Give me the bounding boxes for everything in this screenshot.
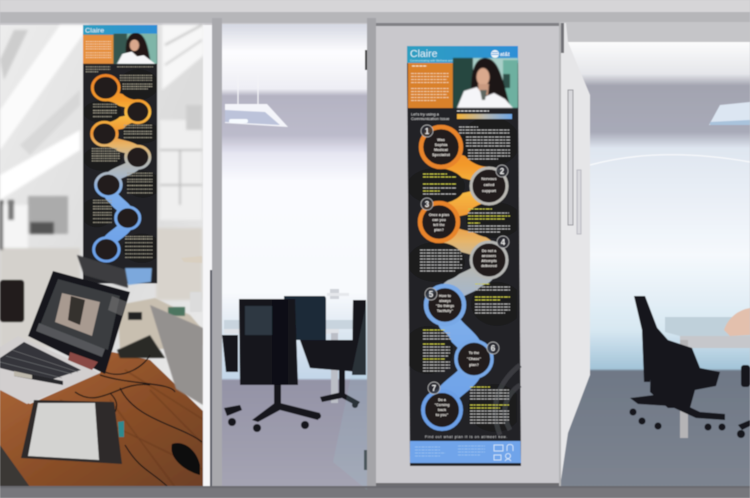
ceiling beams: [0, 25, 204, 348]
body copy yellow blocks: [423, 174, 510, 408]
question node 1: Was: [437, 138, 445, 142]
question node 4: Do not a: [482, 249, 497, 253]
question node 5: "Do things: [436, 304, 454, 308]
badge numerals: 7: [432, 384, 437, 393]
frame bottom edge: [0, 486, 750, 488]
graphics tablet: [21, 400, 124, 464]
back laptop lid: [77, 255, 128, 288]
question node 4: Attempts: [481, 259, 497, 263]
wall art frames: [568, 90, 581, 234]
door glass room: [222, 18, 376, 490]
ceiling lamp: [225, 75, 288, 127]
dark text lobes: [408, 120, 516, 432]
white strip and left divider: [203, 18, 222, 487]
question node 3: plan?: [434, 228, 444, 232]
keyboard: [0, 342, 81, 380]
hand: [724, 308, 750, 336]
question node 2: [471, 168, 507, 204]
desk scene: [0, 255, 204, 487]
stylus pen: [14, 371, 63, 385]
dark camera: [0, 280, 24, 322]
question node 6: [456, 341, 492, 377]
badge numerals: 4: [501, 238, 506, 247]
flowing ribbon: [439, 147, 489, 410]
left poster orange intro: [83, 35, 114, 64]
question node 4: answers: [482, 254, 496, 258]
section heading: Let's try using a: [411, 112, 440, 116]
silver laptop at right: [150, 305, 203, 405]
question node 5: [426, 286, 464, 324]
poster body: [407, 59, 521, 466]
question node 5: Tactfully": [437, 309, 453, 313]
laptop screen: [28, 271, 130, 374]
poster wall: [376, 23, 560, 487]
header band: [407, 46, 518, 63]
question node 1: Sophia: [435, 143, 448, 147]
question node 3: can you: [432, 218, 446, 222]
poster foot blue: [125, 268, 152, 285]
left poster ribbon: [104, 88, 138, 249]
portrait: [453, 58, 518, 108]
light curved reflection: [590, 155, 750, 165]
section heading second line: Communication Issue: [411, 116, 450, 121]
background swoosh: [495, 365, 520, 435]
question node 2: support: [482, 189, 497, 193]
question node 7: "Coming: [434, 403, 450, 407]
badge numerals: 5: [429, 290, 434, 299]
laptop base: [0, 336, 100, 404]
AT&T logo: [491, 50, 510, 58]
footer icons: [494, 444, 513, 461]
question node 2: Nervous: [481, 177, 497, 181]
question node 1: Specialist: [432, 153, 451, 157]
left poster mockup: [80, 25, 161, 283]
door hinge and handle: [327, 50, 367, 470]
ceiling lamp right: [709, 102, 750, 125]
closing line: Find out what plan it is on at/meet now.: [425, 435, 508, 439]
black chairs right: [630, 296, 750, 438]
question node 3: Once a plan: [429, 213, 449, 217]
clutter behind laptop: [117, 292, 203, 358]
right side wall: [559, 23, 590, 487]
question node 2: called: [484, 183, 495, 187]
legend bar: [457, 111, 512, 119]
question node 7: to you": [436, 413, 449, 417]
question node 7: [423, 391, 461, 429]
left poster portrait: [114, 33, 157, 64]
conference table: [224, 320, 366, 403]
body copy white blocks: [420, 127, 510, 423]
cables: [75, 355, 202, 487]
orange intro panel: [408, 63, 453, 108]
question node 4: [471, 242, 507, 278]
badge numerals: 6: [491, 344, 496, 353]
question node 3: tell the: [433, 223, 445, 227]
question node 7: back: [438, 408, 446, 412]
door right frame: [367, 18, 376, 487]
question node 6: "Chase": [467, 357, 481, 361]
left poster text lobes: [84, 70, 156, 262]
badge numerals: 1: [425, 127, 430, 136]
question node 7: Do a: [438, 398, 447, 402]
charger: [171, 443, 200, 475]
question node 4: delivered: [481, 264, 497, 268]
office chairs: [222, 296, 366, 432]
left poster title: Claire: [85, 28, 104, 34]
left poster header: [83, 25, 157, 35]
question node 1: [421, 127, 461, 167]
footer band: [410, 441, 521, 463]
far table top: [181, 256, 202, 263]
title: Claire: [410, 48, 438, 60]
subtitle: Communicating with Wellness and Care: [410, 58, 460, 62]
question node 1: Medical: [434, 148, 448, 152]
wood desk: [0, 352, 204, 487]
question node 3: [420, 203, 458, 241]
photo pane: design studio: [0, 25, 204, 487]
question node 5: always: [439, 299, 451, 303]
badge numerals: 3: [425, 200, 430, 209]
question node 6: To the: [469, 351, 479, 355]
number badges: [421, 125, 509, 394]
left poster body: [83, 25, 157, 283]
question node 6: plan?: [469, 363, 479, 367]
main poster: [403, 46, 523, 466]
left poster copy: [86, 67, 153, 257]
badge numerals: 2: [500, 167, 505, 176]
table right: [665, 317, 750, 438]
badge numerals: [425, 127, 506, 393]
right meeting room: [560, 22, 750, 487]
AT&T logo: at&t: [500, 52, 510, 58]
question node 5: How to: [439, 294, 452, 298]
left poster nodes: [92, 75, 150, 261]
